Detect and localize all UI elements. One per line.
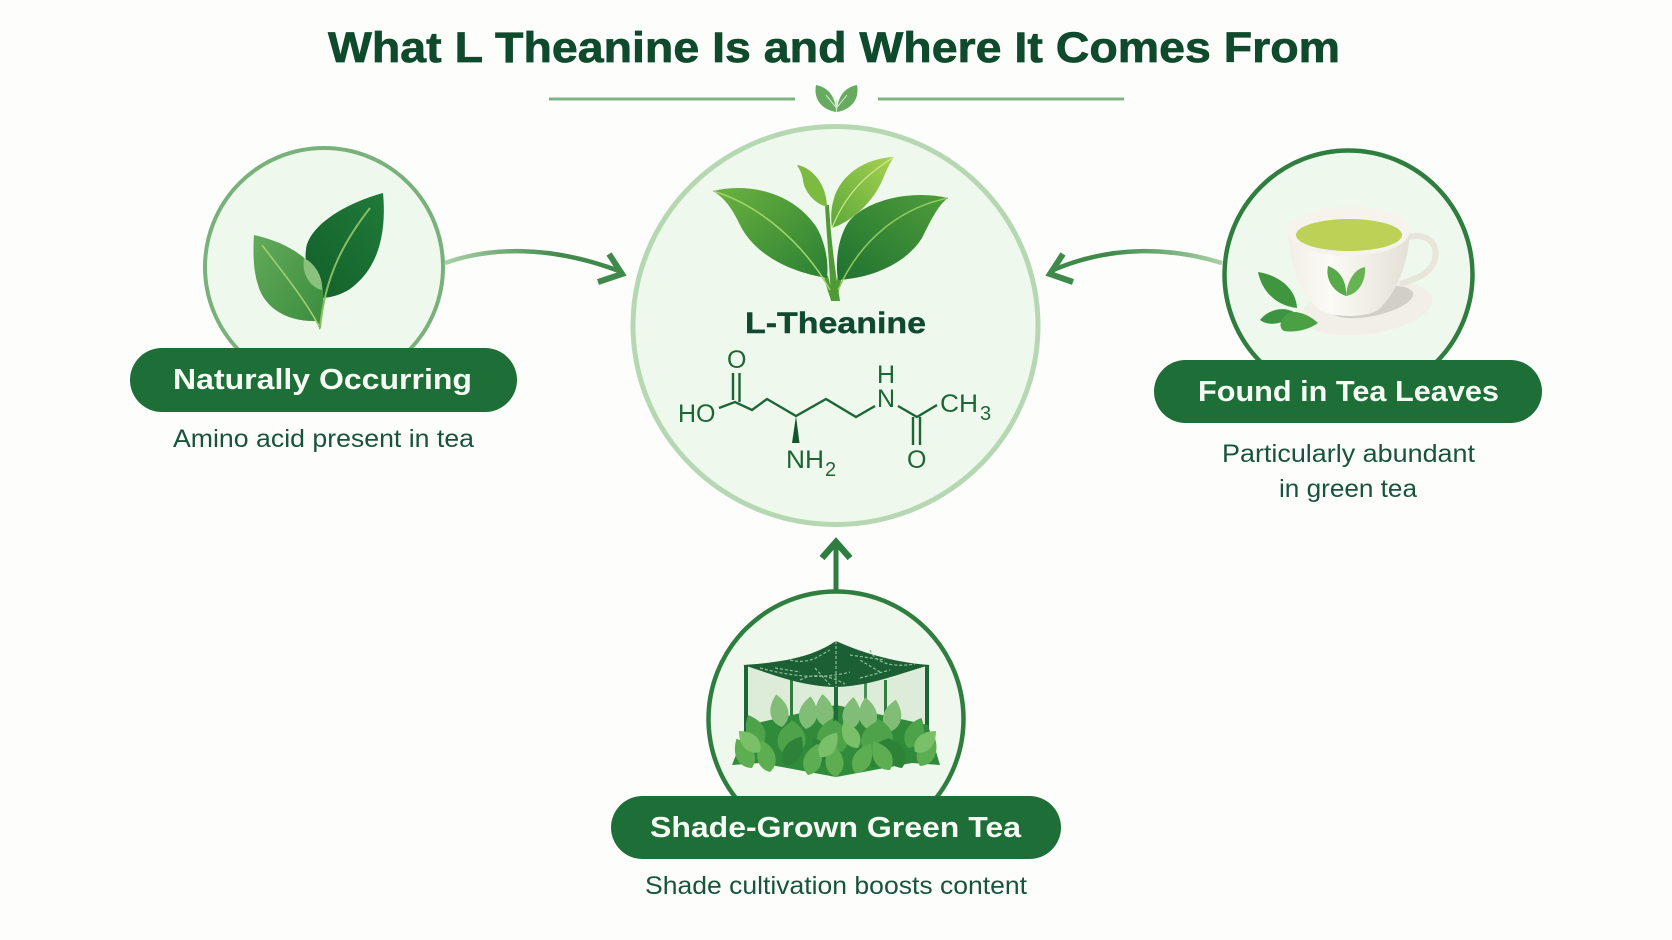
centre pole: [834, 687, 838, 727]
circle: [205, 148, 443, 386]
chemical structure: [678, 346, 991, 481]
arrow: naturally occurring to centre: [445, 251, 622, 282]
circle: [1224, 150, 1472, 398]
chemical structure: HO: [678, 400, 716, 428]
icon: shade net over tea plants: [729, 641, 943, 778]
icon: two leaves: [253, 193, 384, 330]
chemical structure: NH: [786, 446, 824, 474]
chemical structure: N: [877, 385, 895, 413]
panel: naturally occurring: [130, 148, 517, 453]
icon: tea cup: [1258, 206, 1436, 343]
circle: [708, 592, 964, 846]
arrow: shade-grown tea to centre: [822, 542, 850, 590]
panel: found in tea leaves: [1154, 150, 1542, 503]
pill label: Shade-Grown Green Tea: [650, 812, 1022, 844]
title divider with leaf icon: [549, 85, 1124, 112]
chemical structure: O: [727, 346, 746, 374]
icon: tea sprig: [713, 157, 948, 301]
chemical structure: CH: [940, 390, 978, 418]
panel: shade-grown green tea: [611, 592, 1061, 900]
caption: [1222, 440, 1475, 503]
title: What L Theanine Is and Where It Comes From: [328, 24, 1340, 72]
pill: naturally occurring: [130, 348, 517, 412]
chemical structure: 2: [825, 459, 836, 481]
pill label: Found in Tea Leaves: [1198, 376, 1499, 408]
chemical structure: H: [877, 361, 895, 389]
pill label: Naturally Occurring: [173, 364, 472, 396]
caption: Particularly abundant: [1222, 440, 1475, 468]
caption: Shade cultivation boosts content: [645, 872, 1027, 900]
chemical structure: O: [907, 446, 926, 474]
caption: Amino acid present in tea: [173, 425, 474, 453]
chemical structure: 3: [980, 403, 991, 425]
pill: found in tea leaves: [1154, 360, 1542, 423]
caption: in green tea: [1279, 475, 1417, 503]
pill: shade-grown green tea: [611, 796, 1061, 859]
arrow: found in tea leaves to centre: [1050, 251, 1222, 282]
label: L-Theanine: L-Theanine: [745, 307, 926, 340]
panel: central L-Theanine circle: [633, 126, 1038, 524]
